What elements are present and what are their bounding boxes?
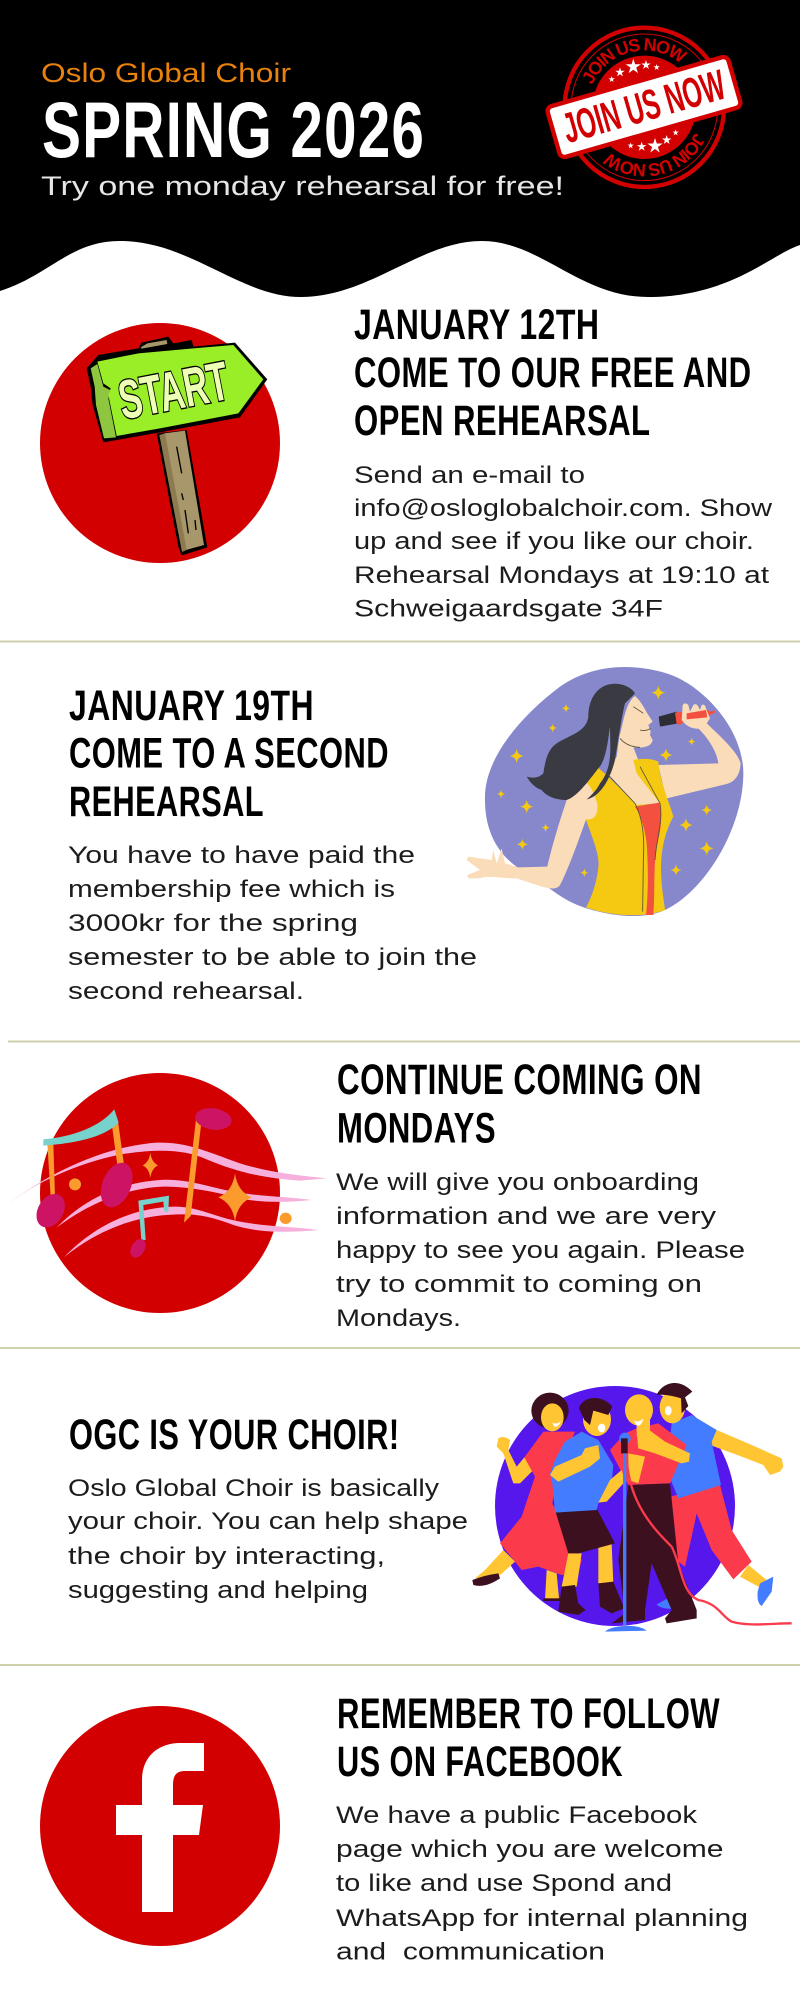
heading xyxy=(69,682,389,826)
heading xyxy=(337,1690,720,1786)
body text: info@osloglobalchoir.com. Show xyxy=(354,495,772,522)
choir name: Oslo Global Choir xyxy=(41,58,291,88)
main title: SPRING 2026 xyxy=(42,85,425,174)
body text: We will give you onboarding xyxy=(336,1169,699,1196)
body text xyxy=(354,462,772,622)
body text: 3000kr for the spring xyxy=(68,910,358,937)
body text: We have a public Facebook xyxy=(336,1802,698,1829)
heading: US ON FACEBOOK xyxy=(337,1738,623,1786)
heading: JANUARY 19TH xyxy=(69,682,314,730)
heading xyxy=(337,1056,702,1152)
icon: join us now stamp: JOIN US NOW xyxy=(582,38,688,84)
body text: WhatsApp for internal planning xyxy=(336,1905,748,1932)
body text xyxy=(68,842,477,1005)
heading: OPEN REHEARSAL xyxy=(354,397,650,445)
header text xyxy=(41,58,564,201)
section 5: facebook xyxy=(40,1690,748,1966)
heading: OGC IS YOUR CHOIR! xyxy=(69,1411,400,1459)
body text: Rehearsal Mondays at 19:10 at xyxy=(354,562,769,589)
heading xyxy=(354,301,752,445)
body text: to like and use Spond and xyxy=(336,1870,672,1897)
heading: JANUARY 12TH xyxy=(354,301,600,349)
header banner with wavy edge xyxy=(0,0,800,297)
section 2: january 19th xyxy=(68,667,743,1005)
microphone stand and cable xyxy=(605,1433,792,1632)
bald singer xyxy=(610,1394,697,1623)
body text: up and see if you like our choir. xyxy=(354,528,754,555)
icon: singer illustration xyxy=(467,667,743,916)
icon: join us now stamp xyxy=(545,26,743,190)
icon: group of singers xyxy=(472,1383,792,1632)
body text: page which you are welcome xyxy=(336,1836,724,1863)
body text: information and we are very xyxy=(336,1203,717,1230)
section 4: ogc is your choir xyxy=(68,1383,792,1632)
icon: music notes on red circle xyxy=(8,1073,327,1313)
icon: join us now stamp: JOIN US NOW xyxy=(602,134,704,177)
woman in red dress xyxy=(472,1393,582,1601)
body text: membership fee which is xyxy=(68,876,395,903)
heading: REHEARSAL xyxy=(69,778,264,826)
icon: start sign on red circle: START xyxy=(113,349,234,431)
icon: start sign on red circle xyxy=(40,323,280,563)
body text: semester to be able to join the xyxy=(68,944,477,971)
body text xyxy=(336,1169,745,1332)
body text: You have to have paid the xyxy=(68,842,415,869)
body text: Schweigaardsgate 34F xyxy=(354,596,663,622)
section 3: continue coming on mondays xyxy=(8,1056,745,1332)
subtitle: Try one monday rehearsal for free! xyxy=(41,171,564,201)
body text: and communication xyxy=(336,1938,605,1966)
heading: MONDAYS xyxy=(337,1104,496,1152)
body text: Send an e-mail to xyxy=(354,462,585,489)
heading: COME TO A SECOND xyxy=(69,730,389,778)
body text: Oslo Global Choir is basically xyxy=(68,1475,440,1502)
singer on the right xyxy=(657,1383,783,1609)
body text xyxy=(68,1475,468,1604)
body text: your choir. You can help shape xyxy=(68,1508,468,1535)
section 1: january 12th xyxy=(40,301,772,622)
body text: suggesting and helping xyxy=(68,1577,368,1604)
body text xyxy=(336,1802,748,1966)
body text: try to commit to coming on xyxy=(336,1271,702,1298)
body text: Mondays. xyxy=(336,1305,461,1332)
icon: facebook logo on red circle xyxy=(40,1706,280,1946)
body text: second rehearsal. xyxy=(68,978,304,1005)
singer in blue shirt xyxy=(550,1398,625,1615)
body text: happy to see you again. Please xyxy=(336,1237,745,1264)
body text: the choir by interacting, xyxy=(68,1543,385,1570)
